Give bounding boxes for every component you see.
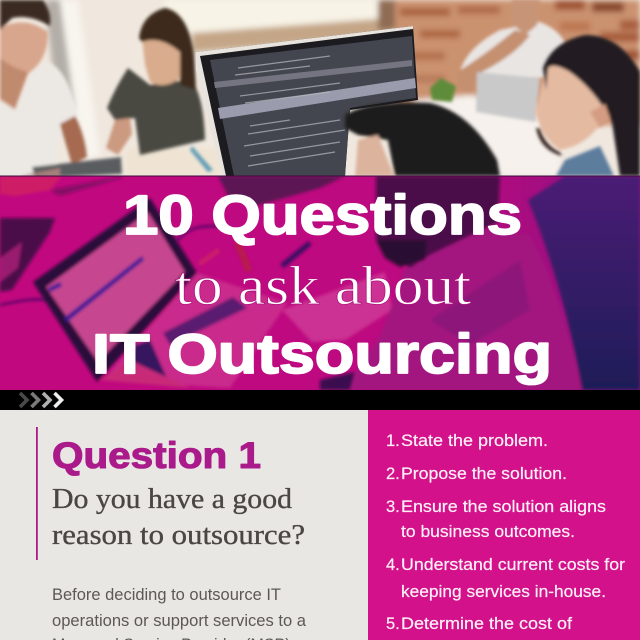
list item 5: Determine the cost of [401, 615, 572, 633]
laptop on the table [33, 198, 287, 388]
title [92, 183, 552, 385]
list item 4 [386, 556, 626, 601]
list item 4: 4. [386, 556, 400, 574]
list item 3: 3. [386, 498, 400, 516]
body text: operations or support services to a [52, 612, 307, 630]
photo: office team at work [0, 0, 640, 178]
list item 3 [386, 498, 606, 541]
body text: Before deciding to outsource IT [52, 586, 281, 604]
black divider bar [0, 390, 640, 410]
keyboard on the table [282, 272, 392, 342]
list item 2: 2. [386, 465, 400, 483]
list item 4: keeping services in-house. [401, 583, 606, 601]
panel: numbered checklist [368, 410, 640, 640]
man at the back with laptop [430, 0, 566, 122]
computer monitor with code [196, 26, 418, 176]
list item 2: Propose the solution. [401, 465, 567, 483]
list item 1: 1. [386, 432, 400, 450]
list item 3: to business outcomes. [401, 523, 575, 541]
accent rule [36, 427, 38, 560]
man with dark hair, head [345, 102, 500, 176]
list item 3: Ensure the solution aligns [401, 498, 606, 516]
title line: 10 Questions: 10 Questions [123, 183, 522, 246]
icon: chevron arrows [20, 393, 62, 407]
subheading: the question [52, 484, 305, 551]
woman's jacket [528, 176, 640, 390]
man's shirt from behind [345, 228, 582, 390]
title line: to ask about: to ask about [175, 255, 471, 316]
subheading: the question: Do you have a good [52, 484, 292, 515]
list item 5: 5. [386, 615, 400, 633]
subheading: the question: reason to outsource? [52, 520, 305, 551]
woman smiling on the right [535, 35, 640, 176]
heading: Question 1: Question 1 [52, 435, 261, 476]
title line: IT Outsourcing: IT Outsourcing [92, 322, 552, 385]
list item 4: Understand current costs for [401, 556, 626, 574]
panel: question 1 [0, 410, 368, 640]
woman in dark t-shirt [106, 8, 213, 172]
magenta photo band [0, 176, 640, 390]
body text [52, 586, 307, 640]
list item 1: State the problem. [401, 432, 548, 450]
man on the left [0, 0, 122, 178]
